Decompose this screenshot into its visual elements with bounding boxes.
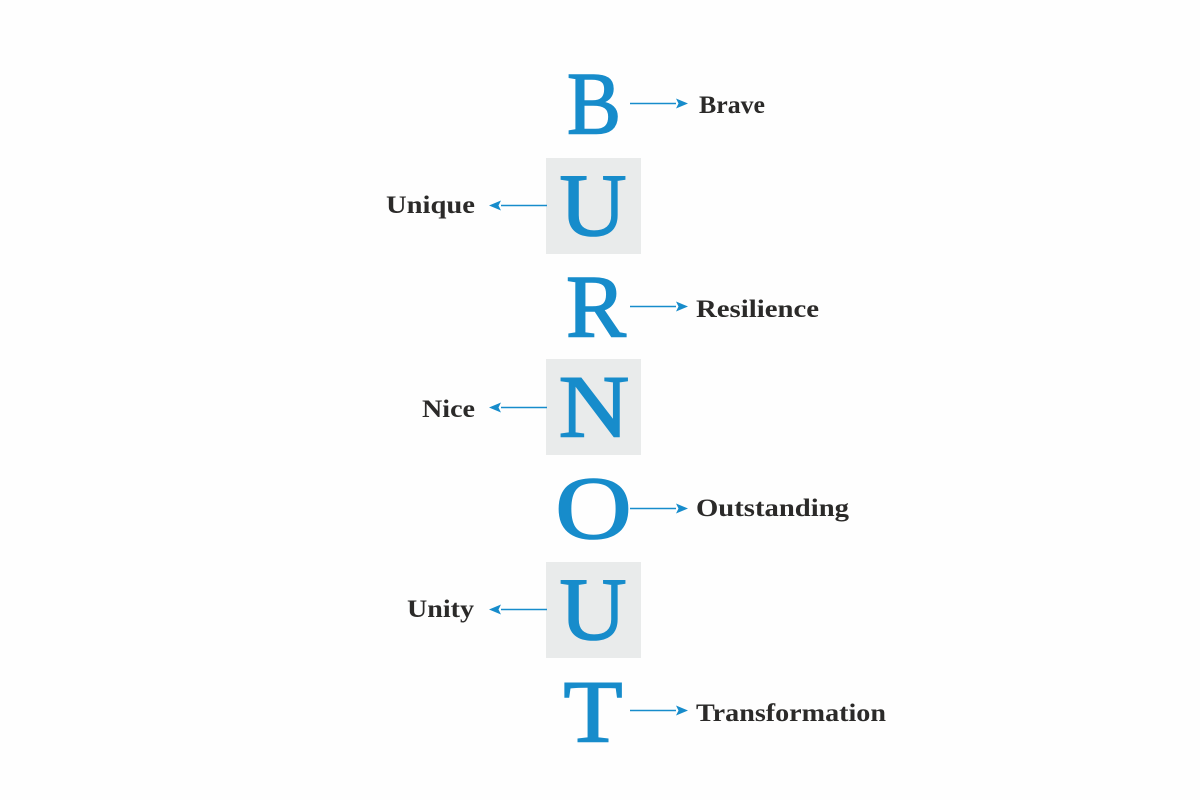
row: R Resilience: Resilience <box>696 296 819 323</box>
row: T Transformation: T <box>563 663 623 762</box>
row: O Outstanding: Outstanding <box>696 495 850 522</box>
row: T Transformation: Transformation <box>696 700 886 727</box>
row: U Unique: Unique <box>386 192 475 219</box>
row: R Resilience: R <box>566 258 626 356</box>
row: O Outstanding: O <box>555 460 632 558</box>
row: U Unity <box>407 560 641 659</box>
row: R Resilience <box>566 258 819 356</box>
row: T Transformation <box>563 663 886 762</box>
row: U Unity: U <box>559 560 627 659</box>
row: N Nice <box>422 358 641 456</box>
row: B Brave: B <box>567 55 621 153</box>
row: O Outstanding <box>555 460 850 558</box>
row: U Unique: U <box>559 156 627 255</box>
row: U Unique <box>386 156 641 255</box>
row: B Brave <box>567 55 765 153</box>
row: N Nice: Nice <box>422 396 475 423</box>
row: N Nice: N <box>559 358 629 456</box>
row: B Brave: Brave <box>699 92 765 119</box>
row: U Unity: Unity <box>407 596 475 623</box>
